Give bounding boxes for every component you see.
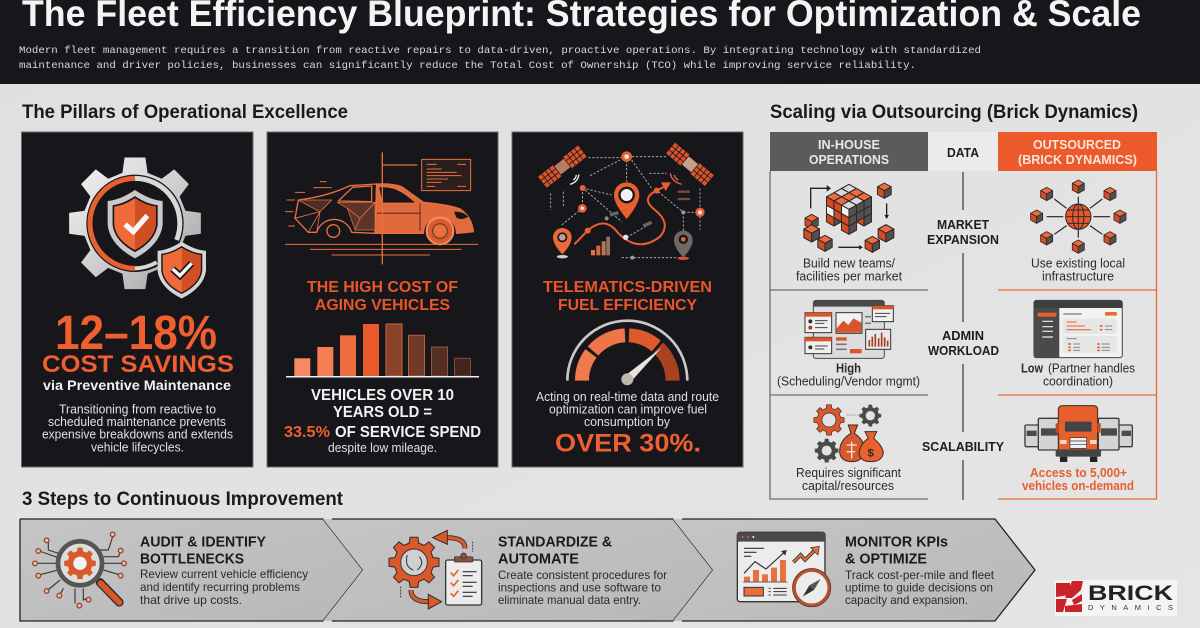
step text: inspections and use software to xyxy=(498,581,661,595)
description: Acting on real-time data and route xyxy=(536,390,719,404)
cell text: market expansion: facilities per market xyxy=(796,270,903,284)
cell text: admin workload: Low xyxy=(1021,362,1043,376)
logo mark xyxy=(1056,581,1083,612)
cell text: market expansion: infrastructure xyxy=(1042,270,1114,284)
panel title xyxy=(543,279,712,314)
cell text: admin workload: (Partner handles xyxy=(1048,362,1135,376)
icon: telematics network xyxy=(538,143,714,260)
icon: KPI dashboard and compass xyxy=(737,532,831,607)
step title xyxy=(845,535,948,567)
description: vehicle lifecycles. xyxy=(91,441,184,455)
panel title xyxy=(307,279,458,314)
step text: Track cost-per-mile and fleet xyxy=(845,568,995,582)
cell text: scalability: Requires significant xyxy=(796,466,901,480)
icon: simple dashboard xyxy=(1034,300,1122,358)
description: expensive breakdowns and extends xyxy=(42,428,233,442)
description: scheduled maintenance prevents xyxy=(48,415,226,429)
panel title: AGING VEHICLES xyxy=(315,297,450,314)
step title: BOTTLENECKS xyxy=(140,551,244,567)
step text: capacity and expansion. xyxy=(845,593,968,607)
icon: gears and money bags xyxy=(814,405,883,463)
row labels: EXPANSION xyxy=(927,232,999,247)
bar chart xyxy=(286,324,479,377)
step text: and identify recurring problems xyxy=(140,580,300,594)
description xyxy=(42,403,233,455)
header banner xyxy=(0,0,1200,84)
stat label: COST SAVINGS xyxy=(42,351,234,378)
cell text: market expansion: Use existing local xyxy=(1031,257,1125,271)
icon: building blocks xyxy=(804,183,894,252)
cell text: scalability: vehicles on-demand xyxy=(1022,479,1134,493)
row labels: ADMIN xyxy=(942,328,984,343)
intro text xyxy=(19,45,981,72)
icon: gear with shields xyxy=(69,157,206,298)
table header: DATA xyxy=(947,146,979,160)
intro text: Modern fleet management requires a transition from reactive repairs to data-driven, proactive operations. By integrating technology with standardized xyxy=(19,45,981,57)
cell text: market expansion: Build new teams/ xyxy=(803,257,896,271)
cell text: admin workload: coordination) xyxy=(1043,375,1113,389)
cell text: admin workload: (Scheduling/Vendor mgmt) xyxy=(777,375,920,389)
note: despite low mileage. xyxy=(328,441,437,455)
cell text: admin workload: High xyxy=(836,362,861,376)
logo wordmark: BRICK xyxy=(1088,582,1173,605)
logo: Brick Dynamics xyxy=(1055,580,1177,616)
chart: fuel gauge xyxy=(567,321,687,385)
step text: Review current vehicle efficiency xyxy=(140,567,308,581)
stat text: YEARS OLD = xyxy=(333,404,432,421)
subheading: via Preventive Maintenance xyxy=(43,377,231,393)
cell text: scalability xyxy=(796,466,1134,493)
description: Transitioning from reactive to xyxy=(59,403,216,417)
step text xyxy=(140,567,308,607)
step text: Create consistent procedures for xyxy=(498,568,667,582)
step title: AUDIT & IDENTIFY xyxy=(140,535,266,551)
step title: STANDARDIZE & xyxy=(498,535,613,551)
stat text: 33.5% xyxy=(284,424,330,441)
row labels: SCALABILITY xyxy=(922,439,1004,454)
row labels: WORKLOAD xyxy=(928,343,999,358)
heading: steps: 3 Steps to Continuous Improvement xyxy=(22,489,344,510)
panel title: FUEL EFFICIENCY xyxy=(558,297,697,314)
icon: gear and checklist xyxy=(389,530,482,609)
step text: that drive up costs. xyxy=(140,593,242,607)
step title: & OPTIMIZE xyxy=(845,551,927,567)
description: optimization can improve fuel xyxy=(549,403,707,417)
table header: IN-HOUSE xyxy=(818,138,880,152)
stat: 12-18%: 12–18% xyxy=(55,307,217,360)
panel title: THE HIGH COST OF xyxy=(307,279,458,296)
stat: over 30%: OVER 30%. xyxy=(555,430,701,458)
step title: MONITOR KPIs xyxy=(845,535,948,551)
table header xyxy=(770,132,1157,171)
step title xyxy=(140,535,266,567)
panel: preventive maintenance xyxy=(22,132,253,467)
panel: aging vehicles xyxy=(267,132,498,467)
row labels: MARKET xyxy=(937,217,989,232)
icon: aging car xyxy=(285,152,478,264)
step text xyxy=(498,568,667,607)
icon: busy dashboard xyxy=(805,300,893,358)
heading: scaling: Scaling via Outsourcing (Brick Dynamics) xyxy=(770,102,1138,123)
step text xyxy=(845,568,995,607)
cell text: scalability: capital/resources xyxy=(802,479,894,493)
stat text xyxy=(284,387,481,441)
icon: truck fleet xyxy=(1025,406,1132,462)
table header: OPERATIONS xyxy=(809,153,889,167)
comparison table xyxy=(770,132,1157,500)
cell text: scalability: Access to 5,000+ xyxy=(1030,466,1127,480)
cell text: market expansion xyxy=(796,257,1125,284)
description xyxy=(536,390,719,429)
step 3: monitor xyxy=(673,519,1035,621)
stat text: VEHICLES OVER 10 xyxy=(311,387,454,404)
row labels xyxy=(922,217,1004,454)
step text: uptime to guide decisions on xyxy=(845,581,993,595)
intro text: maintenance and driver policies, businesses can significantly reduce the Total Cost of Ownership (TCO) while improving service reliability. xyxy=(19,60,916,72)
stat text: OF SERVICE SPEND xyxy=(335,424,481,441)
step text: eliminate manual data entry. xyxy=(498,593,641,607)
table header: OUTSOURCED xyxy=(1033,138,1121,152)
icon: magnifier and circuit xyxy=(33,532,126,608)
panel title: TELEMATICS-DRIVEN xyxy=(543,279,712,296)
step 1: audit xyxy=(20,519,363,621)
description: consumption by xyxy=(584,415,671,429)
panel: telematics xyxy=(512,132,743,467)
cell text: admin workload xyxy=(777,362,1135,389)
icon: global hub xyxy=(1031,180,1126,253)
icon: gears and money bags: $ xyxy=(867,448,874,460)
heading: pillars: The Pillars of Operational Excellence xyxy=(22,102,348,123)
step title: AUTOMATE xyxy=(498,551,579,567)
step title xyxy=(498,535,613,567)
step 2: standardize xyxy=(323,519,713,621)
logo subtitle: DYNAMICS xyxy=(1088,603,1173,612)
table header: (BRICK DYNAMICS) xyxy=(1018,153,1137,167)
